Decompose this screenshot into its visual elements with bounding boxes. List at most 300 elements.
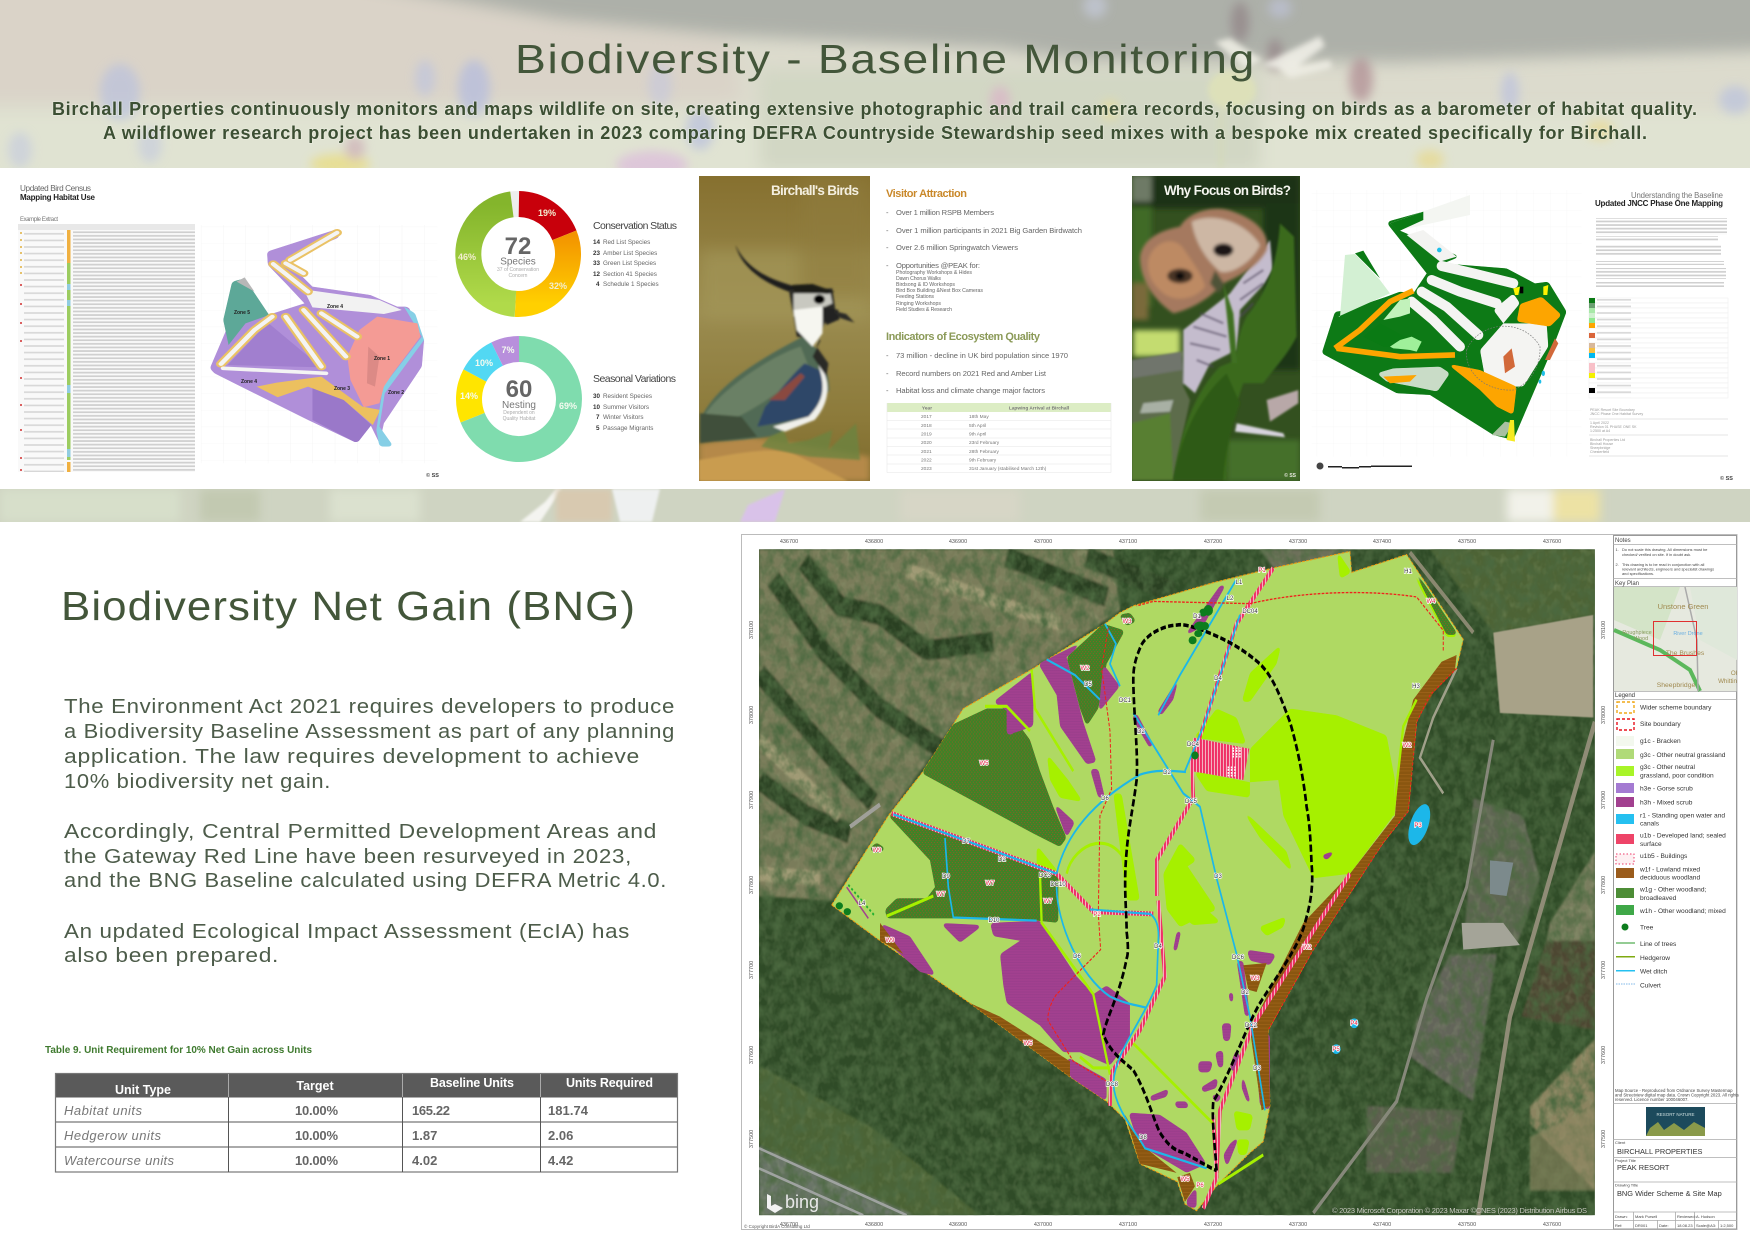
right coordinates: 377500 [1601, 1130, 1607, 1148]
heading: visitor attraction: Visitor Attraction [886, 188, 967, 200]
left coordinates: 378000 [749, 706, 755, 724]
JNCC habitat map [1312, 190, 1582, 457]
zone labels: Zone 4 [327, 304, 343, 310]
visitor attraction bullets: Birdsong & ID Workshops [896, 282, 955, 288]
visitor attraction bullets: Bird Box Building &Nest Box Cameras [896, 288, 983, 294]
habitat: other woodland hatch [868, 557, 1458, 923]
client and project details: Reviewed: [1677, 1214, 1696, 1219]
ditch labels: D9 [942, 874, 950, 880]
key plan: Unstone Green [1658, 602, 1708, 611]
ditch labels: D4 [1154, 944, 1162, 950]
donut chart: seasonal variations: 60 [506, 376, 532, 403]
visitor attraction bullets: Ringing Workshops [896, 301, 941, 307]
map labels [872, 568, 1436, 1189]
map legend: h3e - Gorse scrub [1640, 786, 1693, 792]
donut chart: seasonal variations [460, 345, 577, 449]
map legend: w1g - Other woodland; [1639, 886, 1707, 894]
bottom coordinates: 437200 [1204, 1222, 1222, 1228]
donut chart: conservation status [458, 204, 568, 304]
body text: BNG explanation: the Gateway Red Line have been resurveyed in 2023, [64, 846, 632, 868]
table: unit requirement: Unit Type [115, 1083, 171, 1097]
donut chart: conservation status: 19% [538, 208, 556, 218]
map labels: W5 [1180, 1177, 1190, 1183]
wet ditches [893, 579, 1265, 1168]
map labels: P1 [1258, 568, 1266, 574]
ditch labels: L2 [1227, 596, 1234, 602]
notes: checked/ verified on site. If in doubt ask. [1622, 552, 1691, 557]
species extract table [18, 224, 195, 472]
client and project details: BNG Wider Scheme & Site Map [1617, 1189, 1722, 1198]
table: lapwing arrival: 2021 [921, 449, 932, 455]
building markers: ⁞⁞⁞ [1232, 745, 1242, 761]
notes: and specifications. [1622, 571, 1654, 576]
client and project details: Mark Pursell [1635, 1214, 1657, 1219]
indicators bullets: - [886, 351, 889, 360]
ditch labels: D2 [1137, 729, 1145, 735]
ditch labels: DC3 [1039, 873, 1052, 879]
right coordinates: 377600 [1601, 1046, 1607, 1064]
map labels: P2 [1093, 912, 1101, 918]
table: lapwing arrival: 23rd February [969, 440, 1000, 446]
notes: relevant architects, engineers and specialist drawings [1622, 566, 1714, 572]
body text: BNG explanation: 10% biodiversity net gain. [64, 771, 331, 793]
legend: seasonal variations: 30 [593, 393, 601, 400]
map legend: canals [1640, 820, 1660, 828]
logo: resort nature: RESORT NATURE [1656, 1112, 1695, 1117]
map labels: W2 [1080, 666, 1090, 672]
table: lapwing arrival: 9th April [969, 432, 986, 438]
table: unit requirement: 2.06 [548, 1128, 573, 1143]
legend: conservation status: 12 [593, 271, 601, 278]
table: unit requirement: Watercourse units [64, 1153, 174, 1168]
map legend: h3h - Mixed scrub [1640, 800, 1693, 806]
zone labels: Zone 5 [234, 310, 250, 316]
ditch labels: D10 [988, 918, 1000, 924]
north arrow and scale bar [1316, 462, 1412, 470]
map labels: P5 [1332, 1047, 1340, 1053]
legend: seasonal variations: Resident Species [603, 393, 652, 400]
ditch labels: D5 [1084, 682, 1092, 688]
ditch labels [859, 569, 1420, 1141]
bottom coordinates: 437000 [1034, 1222, 1052, 1228]
map legend: Wet ditch [1640, 968, 1668, 976]
bottom coordinates [780, 1222, 1561, 1228]
JNCC legend [1589, 298, 1728, 398]
legend: conservation status: Schedule 1 Species [603, 281, 659, 288]
panel: BNG site map [742, 534, 1739, 1230]
description text block [1596, 218, 1727, 287]
table: unit requirement: 1.87 [412, 1128, 437, 1143]
donut chart: conservation status: Concern [509, 273, 528, 279]
right coordinates: 377700 [1601, 961, 1607, 979]
map labels: W9 [872, 848, 882, 854]
panel: bird census and habitat use [18, 184, 677, 479]
map information block: JNCC Phase One Habitat Survey [1590, 412, 1643, 416]
bottom coordinates: 437500 [1458, 1222, 1476, 1228]
client and project details: Ref: [1615, 1223, 1622, 1228]
key plan: Ol [1731, 670, 1737, 677]
top coordinates: 437000 [1034, 539, 1052, 545]
ditch labels: D8 [1139, 1135, 1147, 1141]
map information block: Sheepbridge [1590, 446, 1610, 450]
ditch labels: DC6 [1232, 955, 1245, 961]
top coordinates: 436900 [949, 539, 967, 545]
copyright mark: © SS [426, 472, 439, 479]
table: lapwing arrival: 2020 [921, 440, 932, 446]
left coordinates: 377600 [749, 1046, 755, 1064]
trees [836, 605, 1213, 915]
map legend: Legend [1615, 693, 1635, 699]
ditch labels: D6 [1073, 954, 1081, 960]
key plan: Wood [1634, 636, 1648, 642]
key plan: Whittin [1718, 678, 1738, 685]
right coordinates: 377900 [1601, 791, 1607, 809]
donut chart: conservation status: 32% [549, 281, 567, 291]
key plan: Roughpiece [1622, 630, 1652, 636]
body text: BNG explanation: and the BNG Baseline calculated using DEFRA Metric 4.0. [64, 870, 667, 892]
notes [1615, 538, 1714, 576]
right coordinates: 377800 [1601, 876, 1607, 894]
map legend: grassland, poor condition [1640, 772, 1714, 780]
table: lapwing arrival [887, 403, 1111, 472]
notes: 2. [1616, 562, 1619, 567]
intro paragraph [52, 99, 1697, 143]
panel: white slide strip [0, 168, 1750, 489]
map legend: Wider scheme boundary [1640, 704, 1712, 712]
map labels: W3 [1250, 976, 1260, 982]
map labels: W5 [1024, 1041, 1033, 1047]
legend: seasonal variations: Seasonal Variations [593, 373, 676, 385]
table: unit requirement: Habitat units [64, 1103, 142, 1118]
notes: Notes [1615, 538, 1631, 544]
map legend: u1b - Developed land; sealed [1640, 832, 1726, 840]
site boundary dashed [1048, 593, 1443, 1084]
table: unit requirement: Baseline Units [430, 1076, 514, 1090]
table: lapwing arrival: 2017 [921, 414, 932, 420]
wider scheme boundary dashed [1268, 668, 1457, 1030]
table: unit requirement: 4.42 [548, 1153, 573, 1168]
map information block: 1:2500 at A4 [1590, 429, 1610, 433]
map information block: Chesterfield [1590, 450, 1609, 454]
background: wildflower meadow header [0, 0, 1750, 182]
legend: conservation status: 33 [593, 260, 601, 267]
right coordinates: 378000 [1601, 706, 1607, 724]
donut chart: seasonal variations: 69% [559, 401, 577, 411]
heading: updated bird census: Mapping Habitat Use [20, 193, 96, 202]
notes: Do not scale this drawing. All dimensions must be [1622, 547, 1707, 552]
indicators bullets [886, 351, 1068, 395]
table: unit requirement: Hedgerow units [64, 1128, 162, 1143]
legend: seasonal variations [593, 373, 676, 432]
top coordinates: 436700 [780, 539, 798, 545]
map attribution: © 2023 Microsoft Corporation © 2023 Maxar ©CNES (2023) Distribution Airbus DS [1332, 1206, 1587, 1215]
map labels: W7 [936, 892, 946, 898]
visitor attraction bullets: Dawn Chorus Walks [896, 276, 941, 282]
legend: seasonal variations: 5 [596, 425, 600, 432]
visitor attraction bullets: Over 2.6 million Springwatch Viewers [896, 243, 1018, 252]
visitor attraction bullets: Over 1 million participants in 2021 Big Garden Birdwatch [896, 226, 1082, 235]
left coordinates: 377700 [749, 961, 755, 979]
body text: BNG explanation: An updated Ecological Impact Assessment (EcIA) has [64, 921, 630, 943]
visitor attraction bullets: Opportunities @PEAK for: [896, 261, 980, 270]
map legend: w1h - Other woodland; mixed [1639, 908, 1726, 915]
ditch labels: D3 [1214, 874, 1222, 880]
notes: This drawing is to be read in conjunction with all [1622, 562, 1705, 567]
legend: conservation status: 23 [593, 250, 601, 257]
key plan: Sheepbridge [1657, 682, 1695, 689]
logo: resort nature [1646, 1107, 1705, 1136]
map legend: r1 - Standing open water and [1640, 812, 1725, 820]
table: unit requirement: 10.00% [295, 1128, 338, 1143]
donut chart: seasonal variations: Quality Habitat [503, 416, 536, 422]
habitat zone map [201, 225, 437, 463]
map labels: W7 [986, 881, 995, 887]
donut chart: conservation status: 72 [505, 233, 531, 260]
heading: understanding the baseline: Updated JNCC Phase One Mapping [1595, 199, 1723, 208]
map information block: PEAK Resort Site Boundary [1590, 408, 1635, 412]
table: unit requirement: 10.00% [295, 1103, 338, 1118]
aerial photo with habitat overlay [759, 549, 1595, 1215]
ditch labels: DC1 [1119, 698, 1132, 704]
ditch labels: H1 [1404, 569, 1412, 575]
indicators bullets: - [886, 369, 889, 378]
donut chart: conservation status: 46% [458, 252, 476, 262]
top coordinates: 437500 [1458, 539, 1476, 545]
client and project details: Date: [1659, 1223, 1669, 1228]
visitor attraction bullets: Feeding Stations [896, 294, 934, 300]
map legend: Line of trees [1640, 941, 1677, 948]
indicators bullets: Record numbers on 2021 Red and Amber List [896, 369, 1047, 378]
client and project details: A. Hudson [1696, 1214, 1715, 1219]
map legend: w1f - Lowland mixed [1639, 866, 1700, 874]
map labels: W4 [1426, 599, 1436, 605]
heading: updated bird census: Updated Bird Census [20, 184, 91, 193]
heading: biodiversity net gain: Biodiversity Net Gain (BNG) [61, 583, 636, 629]
client and project details: Drawing Title [1615, 1182, 1639, 1188]
top coordinates: 437600 [1543, 539, 1561, 545]
map legend: Culvert [1640, 982, 1661, 990]
left coordinates [749, 621, 755, 1148]
left coordinates: 377800 [749, 876, 755, 894]
legend: conservation status: Red List Species [603, 239, 650, 246]
top coordinates: 437200 [1204, 539, 1222, 545]
legend: conservation status: Conservation Status [593, 220, 677, 232]
panel: owl photo [1132, 175, 1300, 482]
top coordinates: 437100 [1119, 539, 1137, 545]
map labels: W2 [1302, 945, 1312, 951]
donut chart: seasonal variations: 7% [501, 345, 515, 355]
visitor attraction bullets: - [886, 261, 889, 270]
bottom coordinates: 436700 [780, 1222, 798, 1228]
ditch labels: DC5 [1185, 799, 1198, 805]
map information block: Birchall House [1590, 442, 1613, 446]
body text: BNG explanation: The Environment Act 2021 requires developers to produce [64, 696, 675, 718]
visitor attraction bullets: - [886, 243, 889, 252]
client and project details: DR001 [1635, 1223, 1648, 1228]
client and project details: Scale@A3: [1696, 1223, 1716, 1228]
table: lapwing arrival: Lapwing Arrival at Birchall [1009, 406, 1069, 412]
donut chart: conservation status: 37 of Conservation [497, 267, 539, 273]
ditch labels: L1 [1236, 580, 1243, 586]
right coordinates: 378100 [1601, 621, 1607, 639]
visitor attraction bullets: Photography Workshops & Hides [896, 270, 972, 276]
map information block [1589, 408, 1728, 456]
habitat: developed land [892, 568, 1350, 1209]
body text: BNG explanation: a Biodiversity Baseline Assessment as part of any planning [64, 721, 675, 743]
black access route dashed [1103, 625, 1312, 1171]
map legend: Hedgerow [1640, 955, 1670, 962]
heading: understanding the baseline: Understanding the Baseline [1631, 191, 1723, 200]
ditch labels: D2 [998, 857, 1006, 863]
building markers [1228, 748, 1241, 776]
map information block: Revision 01 PHASE ONE SK [1590, 425, 1637, 429]
map labels: W7 [1044, 899, 1053, 905]
zone labels: Zone 1 [374, 356, 390, 362]
map legend: broadleaved [1640, 895, 1677, 902]
bottom coordinates: 437100 [1119, 1222, 1137, 1228]
legend: conservation status: Amber List Species [603, 250, 657, 257]
zone labels [234, 304, 404, 396]
table: lapwing arrival: 2023 [921, 466, 932, 472]
key plan: The Brushes [1666, 650, 1705, 657]
legend: seasonal variations: Summer Visitors [603, 404, 649, 411]
heading: indicators of ecosystem quality: Indicators of Ecosystem Quality [886, 331, 1041, 343]
map copyright: © Copyright BirdA Consulting Ltd [744, 1223, 810, 1229]
ditch labels: D2 [1163, 770, 1171, 776]
top coordinates: 437300 [1289, 539, 1307, 545]
table: lapwing arrival: 31st January (stabilised March 12th) [969, 466, 1047, 472]
left coordinates: 377500 [749, 1130, 755, 1148]
bottom coordinates: 436800 [865, 1222, 883, 1228]
map legend: g3c - Other neutral [1640, 764, 1696, 771]
map labels: W9 [886, 938, 895, 944]
ditch labels: DC04 [1242, 609, 1258, 615]
bing logo: bing [785, 1192, 819, 1212]
table: unit requirement: 4.02 [412, 1153, 437, 1168]
legend: conservation status: 14 [593, 239, 601, 246]
ditch labels: D3 [1253, 1066, 1261, 1072]
legend: conservation status [593, 220, 677, 288]
body text: BNG explanation: also been prepared. [64, 945, 279, 967]
table: unit requirement [56, 1074, 678, 1172]
map legend: deciduous woodland [1640, 874, 1700, 882]
donut chart: conservation status: Species [500, 256, 536, 268]
table: unit requirement: 181.74 [548, 1103, 589, 1118]
donut chart: seasonal variations: 14% [460, 391, 478, 401]
ditch labels: DC2 [1245, 1023, 1258, 1029]
ditch labels: DC8 [1106, 1082, 1119, 1088]
hedgerows [887, 669, 1417, 1184]
zone labels: Zone 4 [241, 379, 257, 385]
map legend: Site boundary [1640, 721, 1681, 728]
legend: seasonal variations: 10 [593, 404, 601, 411]
heading: updated bird census [20, 184, 96, 223]
map information block: 1 April 2022 [1590, 421, 1609, 425]
bottom coordinates: 437400 [1373, 1222, 1391, 1228]
ditch labels: L4 [859, 901, 866, 907]
table: unit requirement: Target [296, 1079, 334, 1093]
legend: conservation status: Section 41 Species [603, 271, 657, 278]
notes: 1. [1616, 547, 1619, 552]
map information block: Birchall Properties Ltd [1590, 438, 1625, 442]
map legend [1615, 693, 1726, 990]
body text: BNG explanation: Accordingly, Central Permitted Development Areas and [64, 821, 657, 843]
map labels: W5 [980, 761, 989, 767]
panel: lapwing photo [699, 176, 870, 481]
ditch labels: D6 [1101, 796, 1109, 802]
table: unit requirement: Units Required [566, 1076, 653, 1090]
map labels: W2 [1402, 743, 1412, 749]
table: lapwing arrival: 28th February [969, 449, 999, 455]
title: Biodiversity - Baseline Monitoring [515, 36, 1256, 82]
panel: lapwing photo: Birchall's Birds [771, 183, 859, 198]
map source note: Map Source - Reproduced from Ordnance Survey Mastermap [1615, 1088, 1733, 1093]
table: lapwing arrival: 2019 [921, 432, 932, 438]
table: lapwing arrival: 5th April [969, 423, 986, 429]
table: unit requirement: 10.00% [295, 1153, 338, 1168]
building markers: ⁞⁞⁞ [1227, 764, 1237, 780]
map legend: u1b5 - Buildings [1640, 853, 1688, 860]
pond P3 [1332, 799, 1435, 1054]
map source note [1615, 1088, 1739, 1102]
indicators bullets: 73 million - decline in UK bird population since 1970 [896, 351, 1068, 360]
client and project details: Project Title [1615, 1158, 1637, 1163]
visitor attraction bullets: Over 1 million RSPB Members [896, 208, 994, 217]
bottom coordinates: 437300 [1289, 1222, 1307, 1228]
table: lapwing arrival: 2018 [921, 423, 932, 429]
map labels: P4 [1350, 1021, 1358, 1027]
map source note: reserved. Licence number 100046007. [1615, 1097, 1689, 1102]
table: lapwing arrival: 18th May [969, 414, 989, 420]
panel: owl photo: Why Focus on Birds? [1164, 183, 1291, 198]
zone labels: Zone 3 [334, 386, 350, 392]
ditch labels: H3 [1412, 684, 1420, 690]
top coordinates [780, 539, 1561, 545]
left coordinates: 378100 [749, 621, 755, 639]
habitat: lowland mixed woodland [880, 655, 1457, 1202]
ditch labels: DC10 [1050, 882, 1066, 888]
map source note: and Streetview digital map data. Crown Copyright 2023. All rights [1615, 1092, 1739, 1098]
indicators bullets: Habitat loss and climate change major factors [896, 386, 1045, 395]
map labels: W3 [1122, 619, 1132, 625]
key plan: Key Plan [1615, 581, 1639, 587]
panel: JNCC phase one mapping [1312, 190, 1733, 482]
intro paragraph: Birchall Properties continuously monitors and maps wildlife on site, creating extensive photographic and trail camera records, focusing on birds as a barometer of habitat quality. [52, 99, 1697, 119]
key plan: River Drone [1673, 631, 1703, 637]
bing logo [767, 1192, 819, 1213]
key plan [1614, 581, 1738, 691]
table: lapwing arrival: Year [922, 406, 932, 412]
visitor attraction bullets: Field Studies & Research [896, 307, 952, 313]
bottom coordinates: 436900 [949, 1222, 967, 1228]
habitat: neutral grassland site area [832, 551, 1463, 1211]
client and project details: PEAK RESORT [1617, 1163, 1670, 1172]
ditch labels: D1 [1193, 614, 1201, 620]
body text: BNG explanation: application. The law requires development to achieve [64, 746, 640, 768]
title block sidebar [1613, 536, 1739, 1229]
visitor attraction bullets [886, 208, 1082, 313]
top coordinates: 436800 [865, 539, 883, 545]
heading: updated bird census: Example Extract [20, 217, 58, 223]
table: lapwing arrival: 9th February [969, 458, 997, 464]
map legend: Tree [1640, 924, 1654, 932]
legend: conservation status: Green List Species [603, 260, 656, 267]
left coordinates: 377900 [749, 791, 755, 809]
legend: seasonal variations: Winter Visitors [603, 414, 643, 421]
visitor attraction bullets: - [886, 226, 889, 235]
map labels: P6 [1196, 1183, 1204, 1189]
ditch labels: D2 [1241, 990, 1249, 996]
